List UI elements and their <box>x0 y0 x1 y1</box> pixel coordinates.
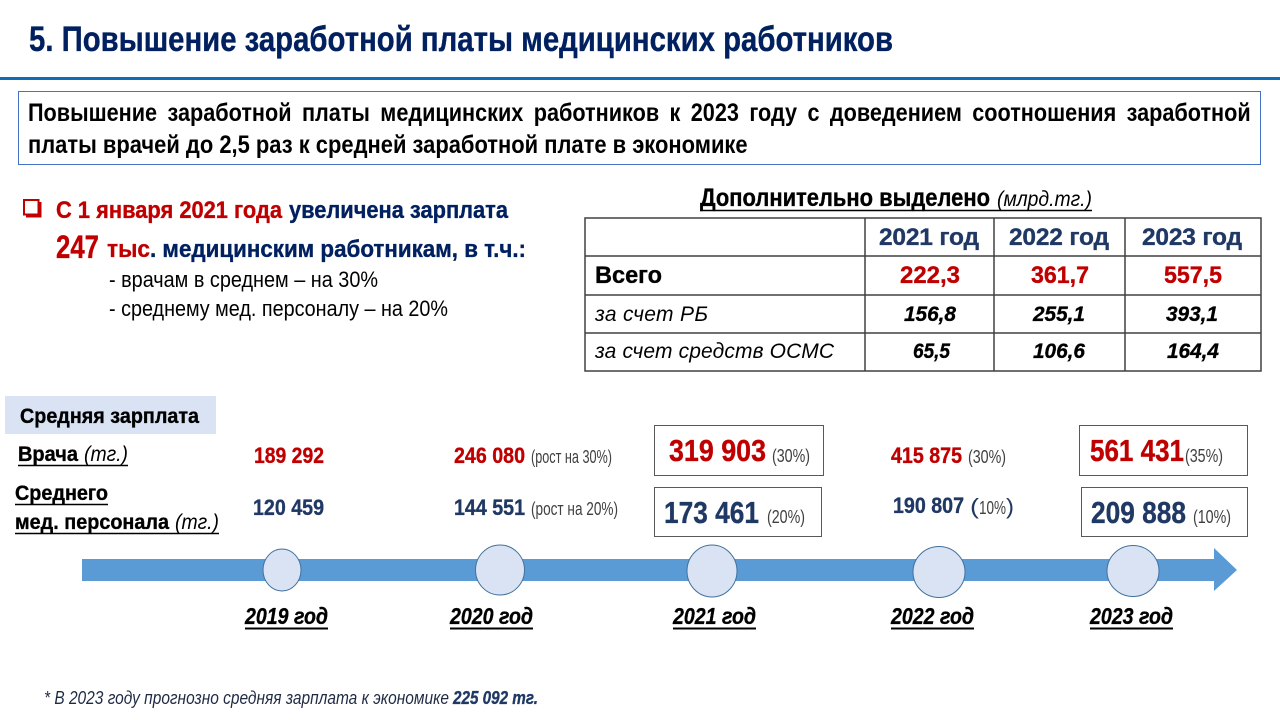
marker: 2020 <box>476 545 524 595</box>
table header row: 2022 год <box>1009 224 1109 251</box>
callout: nursing staff 2021 <box>654 488 822 536</box>
table row: OSMS funds: 164,4 <box>1167 339 1219 363</box>
callout: doctor 2023: (35%) <box>1185 446 1223 466</box>
marker: 2023 <box>1107 546 1159 596</box>
marker: 2022 <box>913 546 965 598</box>
callout: nursing staff 2023 <box>1082 488 1248 536</box>
table row: total: 222,3 <box>900 262 960 289</box>
text block: pay rise effective 1 January 2021: - среднему мед. персоналу – на 20% <box>109 296 448 321</box>
values: 2022: 415 875 <box>891 443 962 468</box>
text block: pay rise effective 1 January 2021: увеличена зарплата <box>289 197 508 224</box>
callout: nursing staff 2023: (10%) <box>1193 507 1231 527</box>
table row: OSMS funds: 65,5 <box>913 339 951 363</box>
goal statement box: с <box>807 99 819 127</box>
table row: republican budget: за счет РБ <box>594 303 708 326</box>
values: 2022 <box>891 443 1014 519</box>
year labels: 2019 год <box>244 603 328 629</box>
values: 2022: ) <box>1006 494 1014 519</box>
values: 2023 <box>1080 426 1248 536</box>
table header row: 2021 год <box>879 224 979 251</box>
label: nursing staff: Среднего <box>15 482 108 505</box>
values: 2020: (рост на 30%) <box>531 447 612 467</box>
values: 2020: 144 551 <box>454 495 525 520</box>
marker: 2021 <box>687 545 737 597</box>
goal statement box <box>18 91 1261 165</box>
goal statement box: году <box>749 99 797 127</box>
label: doctor: (тг.) <box>84 443 128 466</box>
label: nursing staff: (тг.) <box>175 511 219 534</box>
text block: pay rise effective 1 January 2021: . медицинским работникам, в т.ч.: <box>150 236 526 263</box>
text block: pay rise effective 1 January 2021 <box>24 197 526 321</box>
table header row <box>879 224 1242 251</box>
table row: OSMS funds: 106,6 <box>1033 339 1086 363</box>
goal statement box: медицинских <box>380 99 523 127</box>
table heading: (млрд.тг.) <box>997 187 1092 211</box>
table row: OSMS funds: за счет средств ОСМС <box>594 340 835 363</box>
goal statement box: Повышение <box>28 99 157 127</box>
values: 2022: ( <box>970 494 980 519</box>
table header row: 2023 год <box>1142 224 1242 251</box>
row labels: average salary <box>5 396 219 534</box>
table heading: Дополнительно выделено <box>700 184 990 212</box>
values: 2022: 10% <box>979 498 1006 518</box>
values: 2022: 190 807 <box>893 493 964 518</box>
goal statement box: работников <box>534 99 659 127</box>
year labels: 2020 год <box>449 603 533 629</box>
year labels: 2022 год <box>890 603 974 629</box>
footnote: 225 092 тг. <box>452 688 538 708</box>
text block: pay rise effective 1 January 2021: С 1 января 2021 года <box>56 197 282 224</box>
marker: 2019 <box>263 549 301 591</box>
goal statement box: заработной <box>167 99 292 127</box>
table row: total: Всего <box>595 262 662 289</box>
year labels: 2021 год <box>672 603 756 629</box>
values: 2019: 189 292 <box>254 443 324 468</box>
callout: nursing staff 2021: 173 461 <box>664 495 759 530</box>
table row: total: 361,7 <box>1031 262 1089 289</box>
label: average salary <box>5 396 216 434</box>
goal statement box: платы врачей до 2,5 раз к средней заработной плате в экономике <box>28 131 748 159</box>
year labels <box>244 603 1173 629</box>
goal statement box: платы <box>302 99 370 127</box>
text block: pay rise effective 1 January 2021: 247 <box>56 229 99 265</box>
values: 2019: 120 459 <box>253 495 324 520</box>
label: nursing staff <box>15 482 219 534</box>
callout: doctor 2023: 561 431 <box>1090 433 1184 468</box>
table: additional funding <box>585 184 1261 371</box>
icon: square bullet <box>24 200 42 218</box>
values: 2022: (30%) <box>968 447 1006 467</box>
timeline arrow <box>82 545 1237 598</box>
footnote: * В 2023 году прогнозно средняя зарплата к экономике <box>44 688 449 708</box>
goal statement box: соотношения <box>972 99 1116 127</box>
year labels: 2023 год <box>1089 603 1173 629</box>
callout: doctor 2021: 319 903 <box>669 433 766 468</box>
values: 2020: (рост на 20%) <box>531 499 618 519</box>
label: doctor <box>18 443 128 466</box>
text block: pay rise effective 1 January 2021: - врачам в среднем – на 30% <box>109 267 378 292</box>
table row: total <box>595 262 1222 289</box>
callout: doctor 2021: (30%) <box>772 446 810 466</box>
values: 2021 <box>654 426 824 536</box>
label: nursing staff: мед. персонала <box>15 511 169 534</box>
table row: OSMS funds <box>594 339 1219 363</box>
label: average salary: Средняя зарплата <box>20 405 199 428</box>
goal statement box: доведением <box>830 99 962 127</box>
title: 5. Повышение заработной платы медицинских работников <box>29 20 893 59</box>
goal statement box: к <box>670 99 680 127</box>
callout: doctor 2021 <box>654 426 824 476</box>
text block: pay rise effective 1 January 2021: тыс <box>107 236 150 263</box>
goal statement box: заработной <box>1127 99 1251 127</box>
values: 2019 <box>253 443 324 520</box>
values: 2020: 246 080 <box>454 443 525 468</box>
label: doctor: Врача <box>18 443 78 466</box>
table row: total: 557,5 <box>1164 262 1222 289</box>
callout: doctor 2023 <box>1080 426 1248 476</box>
callout: nursing staff 2023: 209 888 <box>1091 495 1186 530</box>
goal statement box: 2023 <box>691 99 739 127</box>
table row: republican budget <box>594 302 1218 326</box>
table row: republican budget: 393,1 <box>1166 302 1218 326</box>
table row: republican budget: 255,1 <box>1032 302 1085 326</box>
values: 2020 <box>454 443 618 520</box>
table row: republican budget: 156,8 <box>904 302 956 326</box>
callout: nursing staff 2021: (20%) <box>767 507 805 527</box>
